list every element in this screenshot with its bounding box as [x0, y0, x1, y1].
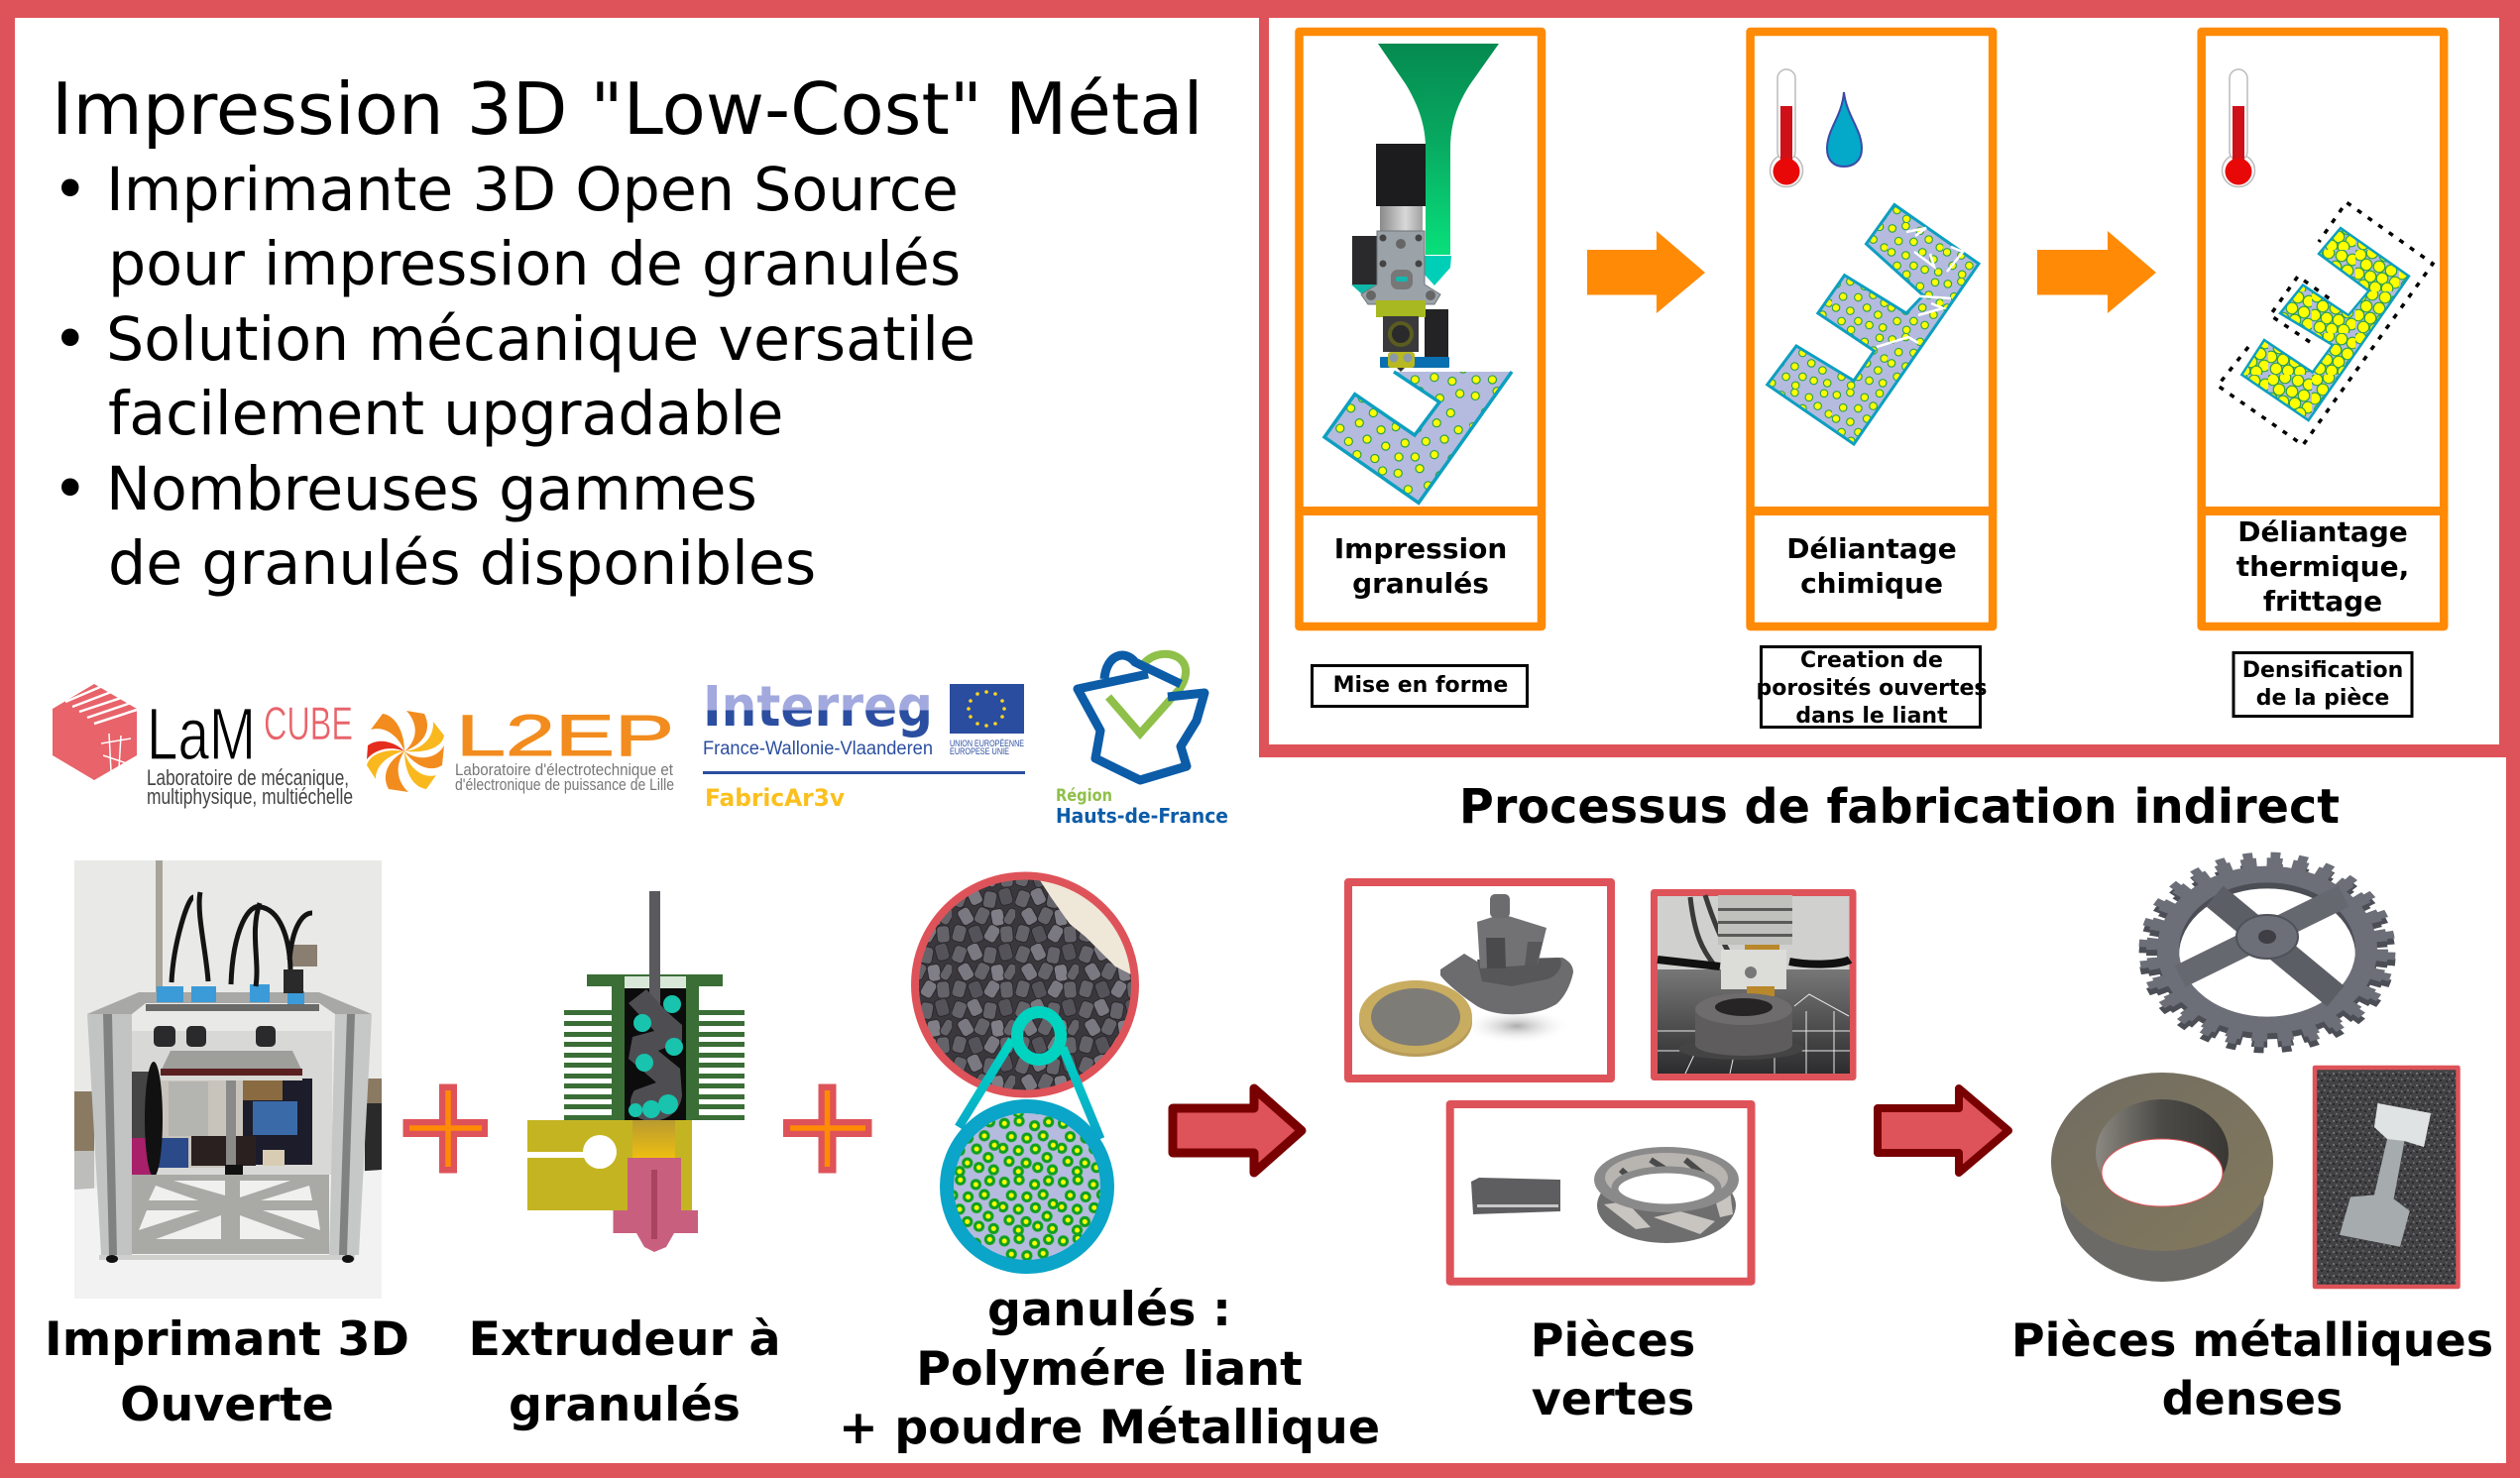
arrow: orange 1 [1587, 231, 1705, 313]
label: green parts: vertes [1532, 1372, 1694, 1425]
callout: densification: Densification [2242, 658, 2403, 683]
text block: bullet list: Solution mécanique versatile [106, 305, 975, 375]
logo: LaMCube: multiphysique, multiéchelle [147, 784, 353, 809]
logo: Région Hauts-de-France [1056, 654, 1228, 828]
callout: création de porosités: porosités ouvertes [1756, 676, 1988, 701]
logo: LaMCube: CUBE [264, 697, 353, 749]
logo: LaMCube: LaM [147, 693, 256, 775]
logo: LaMCube: Laboratoire de mécanique, [147, 765, 349, 790]
text block: bullet list: Imprimante 3D Open Source [106, 156, 959, 225]
icon: plus 2 [783, 1084, 871, 1173]
logo: L2EP: d'électronique de puissance de Lille [455, 775, 674, 794]
logo: Interreg [703, 675, 1025, 812]
callout: création de porosités: dans le liant [1795, 704, 1948, 729]
icon: extruder cross-section [527, 891, 745, 1252]
text block: bullet list: • [53, 156, 88, 225]
panel: step 1 printing [1295, 32, 1546, 626]
label: granules [839, 1283, 1380, 1455]
label: granules: Polymére liant [916, 1342, 1303, 1397]
label: extruder: granulés [509, 1378, 741, 1432]
image: granules photo [907, 872, 1138, 1100]
label: extruder [468, 1312, 781, 1432]
panel: step 3 thermal debinding [2198, 32, 2448, 626]
text block: bullet list: de granulés disponibles [108, 529, 816, 599]
panel: green parts photo [1450, 1104, 1751, 1282]
chart: sintered part [2218, 202, 2433, 445]
label: printer: Ouverte [120, 1378, 334, 1432]
icon: plus 1 [403, 1084, 488, 1173]
callout: densification [2234, 652, 2412, 716]
callout: densification: de la pièce [2256, 686, 2389, 711]
logo: Interreg: FabricAr3v [705, 784, 845, 812]
arrow: red 1 [1173, 1088, 1302, 1173]
label: printer: Imprimant 3D [45, 1312, 409, 1367]
logo: L2EP: L2EP [456, 704, 674, 768]
label: Déliantage [1786, 532, 1957, 565]
icon: magnifying loupe [942, 1012, 1115, 1274]
text block: bullet list: • [53, 305, 88, 375]
panel: indirect manufacturing process [1259, 0, 2506, 757]
logo: Interreg: UNION EUROPÉENNE [950, 739, 1024, 748]
callout: création de porosités [1756, 646, 1988, 729]
label: thermique, [2236, 550, 2409, 583]
title: Impression 3D "Low-Cost" Métal [52, 68, 1203, 152]
label: printer [45, 1312, 409, 1432]
label: frittage [2263, 585, 2382, 618]
label: Déliantage [2237, 515, 2408, 548]
logo: Région Hauts-de-France: Hauts-de-France [1056, 804, 1228, 828]
chart: debinded part with cracks [1768, 204, 1979, 444]
icon: water drop [1827, 92, 1862, 167]
logo: L2EP [367, 704, 674, 794]
label: granulés [1352, 567, 1489, 600]
panel: step 2 chemical debinding [1747, 32, 1997, 626]
text block: bullet list: • [53, 455, 88, 524]
label: chimique [1800, 567, 1943, 600]
callout: création de porosités: Creation de [1800, 648, 1943, 673]
arrow: red 2 [1878, 1088, 2008, 1173]
image: open 3D printer photo [74, 860, 382, 1299]
logo: L2EP: Laboratoire d'électrotechnique et [455, 760, 673, 779]
label: dense metal parts: denses [2162, 1372, 2343, 1425]
panel: printing ring photo [1654, 892, 1853, 1077]
label: green parts: Pièces [1531, 1313, 1695, 1367]
icon: funnel and print head [1351, 44, 1499, 372]
arrow: orange 2 [2037, 231, 2156, 313]
image: metal gear [2143, 855, 2391, 1050]
label: dense metal parts: Pièces métalliques [2011, 1313, 2493, 1367]
label: granules: ganulés : [987, 1283, 1231, 1337]
text block: bullet list: Nombreuses gammes [106, 455, 757, 524]
chart: printed part [1324, 372, 1512, 503]
icon: thermometer [2223, 69, 2254, 186]
text block: bullet list: facilement upgradable [108, 380, 783, 449]
label: Impression [1334, 532, 1507, 565]
callout: mise en forme [1313, 666, 1527, 706]
label: granules: + poudre Métallique [839, 1401, 1380, 1455]
label: extruder: Extrudeur à [468, 1312, 781, 1367]
heading: process: Processus de fabrication indirect [1459, 780, 2340, 835]
label: dense metal parts [2011, 1313, 2493, 1425]
logo: Interreg: EUROPESE UNIE [950, 746, 1009, 756]
panel: tensile specimen photo [2315, 1068, 2459, 1287]
logo: Région Hauts-de-France: Région [1056, 786, 1112, 806]
logo: Interreg: Interreg [703, 675, 933, 739]
panel: boat and coin photo [1348, 882, 1611, 1079]
image: dense metal ring [2051, 1073, 2273, 1282]
callout: mise en forme: Mise en forme [1333, 673, 1508, 698]
logo: Interreg: France-Wallonie-Vlaanderen [703, 739, 933, 759]
label: green parts [1531, 1313, 1695, 1425]
icon: thermometer [1771, 69, 1802, 186]
text block: bullet list: pour impression de granulés [108, 230, 961, 299]
logo: LaMCube [53, 684, 353, 809]
text block: bullet list [53, 156, 975, 599]
